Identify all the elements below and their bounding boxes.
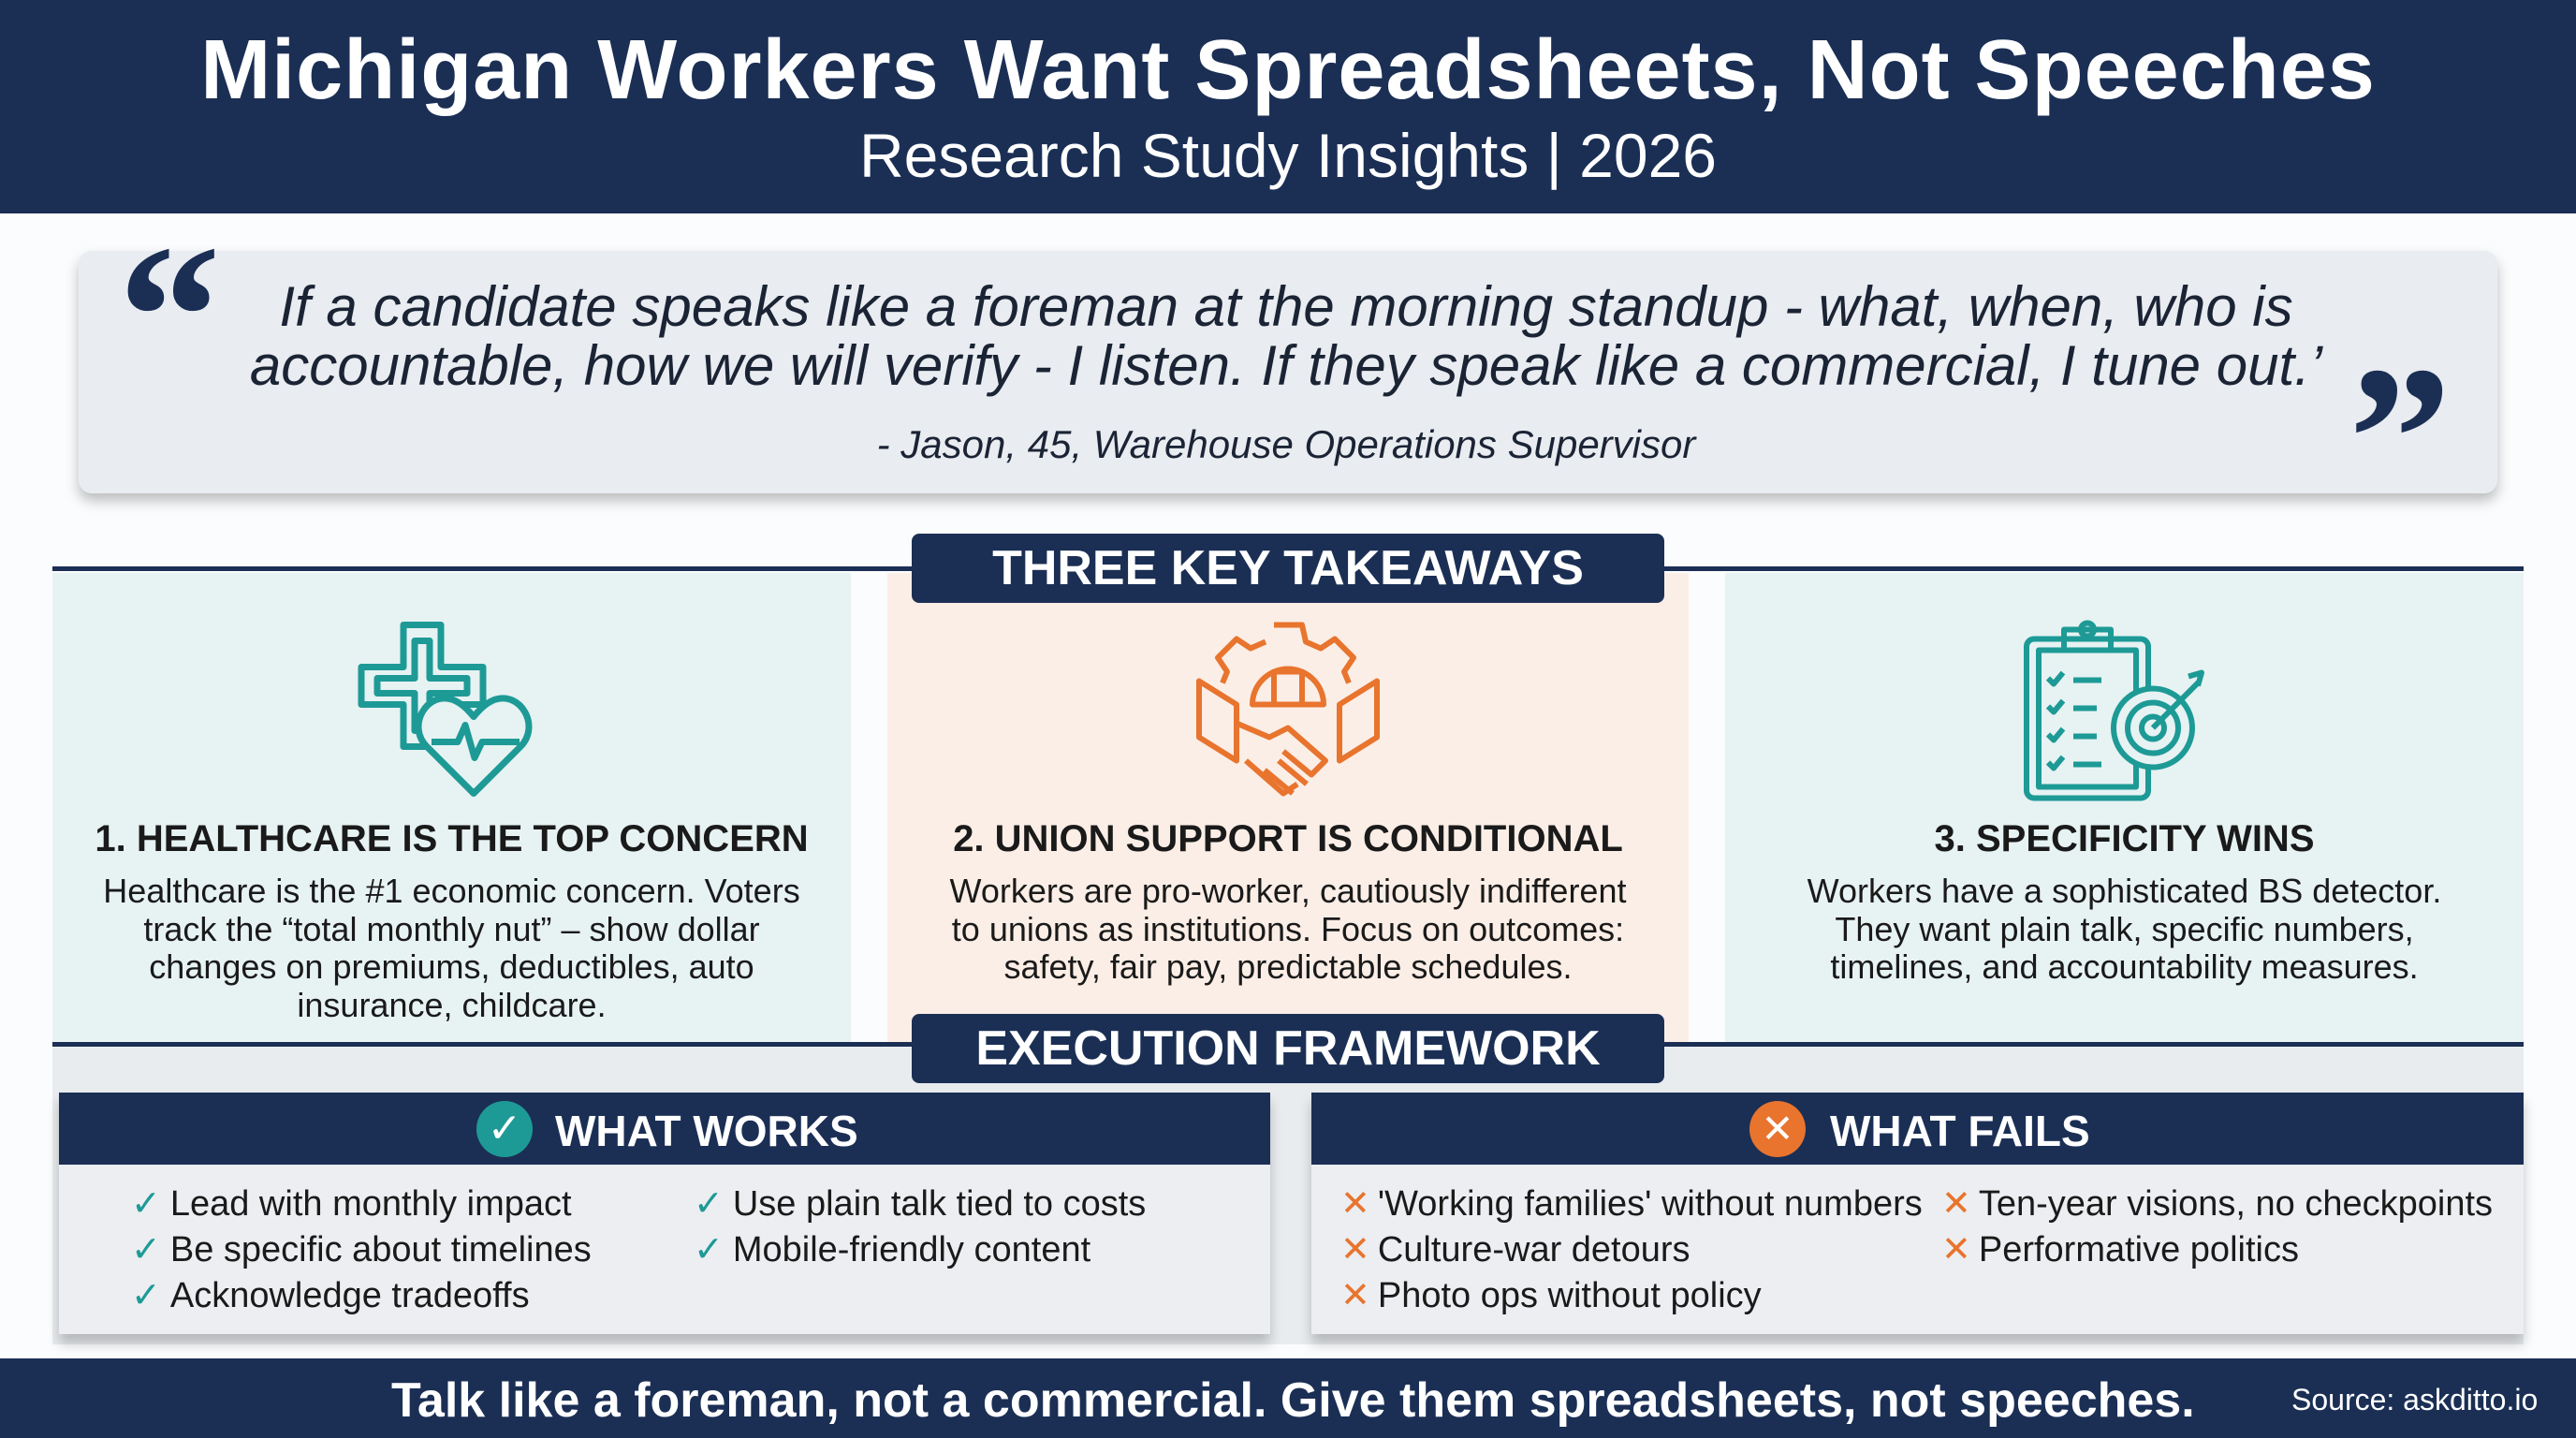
icon: x circle [1749,1101,1806,1157]
icon: check circle: ✓ [488,1106,521,1152]
header: what works: WHAT WORKS [555,1107,858,1155]
icon: medical cross heart [358,622,532,797]
list: works items: ✓ Lead with monthly impact [131,1184,572,1224]
body: Workers have a sophisticated BS detector. They want plain talk, specific numbers, timelines, and accountability measures. [1808,872,2441,986]
body: Workers are pro-worker, cautiously indifferent to unions as institutions. Focus on outcomes: safety, fair pay, predictable schedules. [949,872,1626,986]
badge: three key takeaways [912,534,1664,603]
header: what fails: WHAT FAILS [1830,1107,2090,1155]
list: fails items: ✕Photo ops without policy [1340,1276,1762,1315]
icon: x circle: ✕ [1761,1107,1794,1151]
tagline: Talk like a foreman, not a commercial. Give them spreadsheets, not speeches. [391,1373,2195,1428]
list: fails items: ✕Performative politics [1941,1230,2299,1269]
list: fails items: ✕'Working families' without numbers [1340,1184,1923,1224]
panel: healthcare [52,573,851,1045]
body: Healthcare is the #1 economic concern. Voters track the “total monthly nut” – show dollar changes on premiums, deductibles, auto insurance, childcare. [103,872,800,1024]
heading: 3. SPECIFICITY WINS [1934,818,2314,859]
quote text: accountable, how we will verify - I listen. If they speak like a commercial, I tune out.’ [250,334,2322,397]
subtitle: Research Study Insights | 2026 [859,121,1717,190]
header banner [0,0,2576,213]
list: works items: ✓ Mobile-friendly content [694,1230,1090,1269]
heading: 1. HEALTHCARE IS THE TOP CONCERN [95,818,809,859]
panel: union [887,573,1689,1045]
quote box [79,251,2497,493]
list: works items: ✓ Acknowledge tradeoffs [131,1276,530,1315]
icon: gear handshake [1196,622,1380,797]
source: Source: askditto.io [2291,1383,2538,1416]
panel: what fails [1311,1093,2524,1334]
quote text: If a candidate speaks like a foreman at the morning standup - what, when, who is [279,275,2293,338]
middle rule [52,1042,2524,1047]
list: works items: ✓ Use plain talk tied to costs [694,1184,1146,1224]
close quote mark: ” [2349,324,2452,552]
list: fails items: ✕Ten-year visions, no checkpoints [1941,1184,2493,1224]
attribution: - Jason, 45, Warehouse Operations Supervisor [877,422,1695,466]
badge: execution framework [912,1014,1664,1083]
badge: three key takeaways: THREE KEY TAKEAWAYS [992,541,1584,595]
heading: 2. UNION SUPPORT IS CONDITIONAL [953,818,1623,859]
icon: check circle [476,1101,533,1157]
list: works items [131,1184,1146,1315]
lower band background [52,1045,2524,1344]
list: works items: ✓ Be specific about timelines [131,1230,592,1269]
quote text [250,275,2323,397]
badge: execution framework: EXECUTION FRAMEWORK [975,1021,1601,1076]
open quote mark: “ [118,202,221,431]
top rule [52,566,2524,571]
icon: clipboard target [2024,620,2204,801]
panel: what works [59,1093,1270,1334]
list: fails items [1340,1184,2493,1315]
header: what works [59,1093,1270,1165]
header: what fails [1311,1093,2524,1165]
panel: specificity [1725,573,2524,1045]
title: Michigan Workers Want Spreadsheets, Not Speeches [200,23,2376,117]
list: fails items: ✕Culture-war detours [1340,1230,1690,1269]
footer banner [0,1358,2576,1438]
